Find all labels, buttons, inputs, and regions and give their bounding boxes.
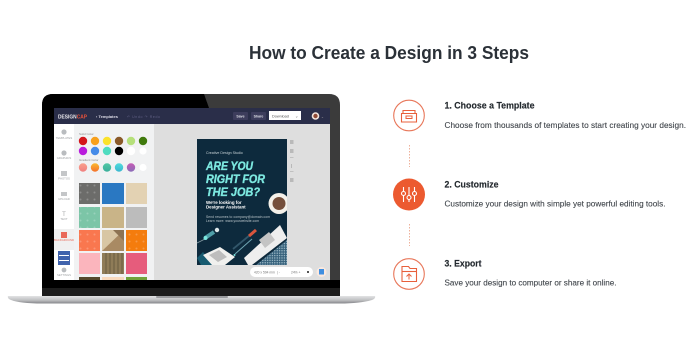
poster: ARE YOU (205, 161, 254, 173)
laptop base (8, 296, 375, 304)
usb cable (197, 228, 219, 243)
step 3 heading: 3. Export (444, 258, 482, 268)
sidebar: TEMPLATES (56, 136, 72, 140)
color and background panel: Gradient Color (79, 158, 99, 162)
sidebar: PHOTOS (58, 176, 70, 180)
app header bar: ‹ Templates (96, 114, 119, 119)
step 2 icon: sliders (393, 178, 425, 210)
app header bar: Save (236, 114, 245, 118)
app header bar: ⌄ (321, 115, 324, 119)
sidebar: SETTINGS (57, 273, 71, 277)
pattern tiles (79, 183, 147, 280)
app header bar: ↶ Undo ↷ Redo (127, 115, 160, 119)
zoom control (250, 267, 326, 277)
title: How to Create a Design in 3 Steps (249, 42, 529, 63)
step 1 description: Choose from thousands of templates to start creating your design. (444, 120, 686, 130)
poster side toolbar (290, 140, 294, 182)
zoom control: 24% + (291, 270, 301, 274)
app header bar: ⌄ (295, 114, 298, 118)
laptop keyboard illustration (244, 225, 287, 265)
app canvas area (154, 124, 330, 280)
step 2 description: Customize your design with simple yet powerful editing tools. (444, 198, 666, 208)
sidebar: UPLOAD (58, 197, 70, 201)
connector 1 (408, 145, 410, 167)
zoom control: | - (277, 270, 280, 274)
app header bar: Share (254, 114, 263, 118)
sidebar: GRAPHICS (57, 156, 71, 160)
poster: We're looking for (206, 200, 242, 205)
poster: THE JOB? (206, 187, 260, 199)
sidebar: T (62, 212, 66, 218)
step 3 description: Save your design to computer or share it online. (444, 278, 616, 288)
pencil and pens (233, 230, 256, 256)
poster: Creative Design Studio (206, 151, 243, 155)
app header bar: DESIGNCAP (58, 114, 87, 120)
poster: RIGHT FOR (206, 174, 266, 186)
app header bar: Download (272, 114, 289, 118)
poster: Send resumes to company@domain.com (206, 215, 270, 219)
coffee cup (268, 193, 287, 214)
app header bar (54, 108, 330, 124)
poster (197, 139, 290, 265)
poster: Designer Assistant (206, 204, 246, 210)
notebook (197, 247, 235, 265)
connector 2 (408, 224, 410, 246)
sidebar: BACKGROUND (54, 238, 74, 242)
color and background panel (74, 124, 154, 280)
sidebar (54, 124, 74, 280)
sidebar: TEXT (60, 217, 68, 221)
poster: Learn more: www.yourwebsite.com (206, 219, 259, 223)
color and background panel: Solid Color (79, 132, 94, 136)
step 1 icon: template box (394, 100, 424, 131)
laptop mockup (8, 94, 375, 304)
laptop lid (42, 94, 340, 296)
step 2 heading: 2. Customize (444, 180, 498, 190)
step 1 heading: 1. Choose a Template (444, 100, 534, 110)
step 3 icon: export (394, 259, 424, 289)
zoom control: 420 x 594 mm (254, 270, 275, 274)
